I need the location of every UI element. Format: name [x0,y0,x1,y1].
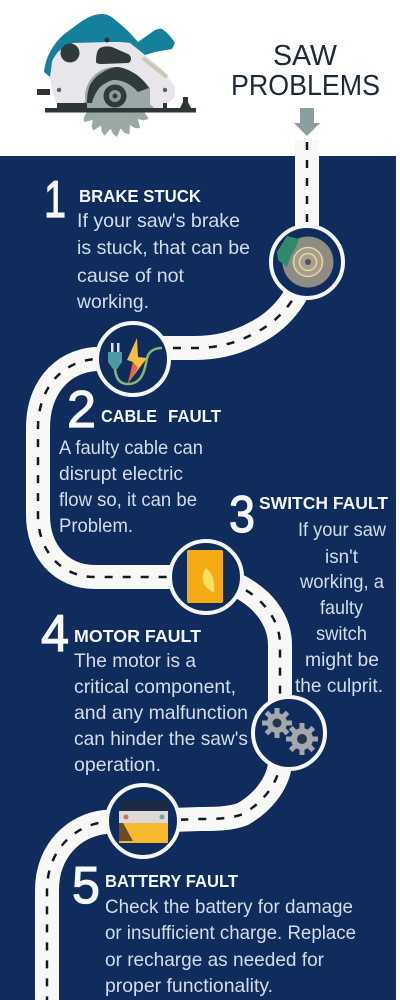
icon: battery [107,785,179,857]
step 5: battery fault: or recharge as needed for [105,949,324,971]
step 4: motor fault: operation. [74,754,161,776]
step 5: battery fault: Check the battery for damage [105,896,353,918]
step 2: cable fault: flow so, it can be [59,489,197,511]
step 3: switch fault: faulty [320,597,363,619]
step 4: motor fault: 4 [41,605,69,663]
icon: circular saw [37,14,196,137]
step 5: battery fault: BATTERY FAULT [105,871,238,891]
step 2: cable fault: A faulty cable can [59,437,203,459]
step 4: motor fault [41,605,248,776]
icon: brake disc [271,226,343,298]
step 2: cable fault [59,381,221,537]
step 5: battery fault [72,857,356,997]
step 3: switch fault: isn't [325,546,359,568]
winding road [38,140,307,1000]
step 3: switch fault: might be [305,649,379,671]
step 4: motor fault: critical component, [74,676,236,698]
step 3: switch fault: If your saw [298,519,387,541]
step 5: battery fault: 5 [72,857,100,915]
icon: cable and lightning [97,323,169,395]
step 5: battery fault: or insufficient charge. Replace [105,922,356,944]
step 3: switch fault: working, a [299,571,384,593]
title: PROBLEMS [231,70,380,102]
title: SAW [273,40,338,72]
title [231,40,380,102]
step 2: cable fault: CABLE [101,406,157,426]
arrow [294,108,320,136]
step 2: cable fault: Problem. [59,515,133,537]
icon: gears [253,697,325,769]
step 1: brake stuck: working. [76,291,149,313]
step 1: brake stuck: cause of not [77,265,185,287]
step 4: motor fault: can hinder the saw's [74,728,248,750]
icon: switch [170,541,242,613]
step 2: cable fault: FAULT [168,406,221,426]
step 3: switch fault: the culprit. [295,675,383,697]
step 4: motor fault: MOTOR FAULT [74,626,201,646]
step 2: cable fault: 2 [67,381,96,439]
step 2: cable fault: disrupt electric [59,463,183,485]
step 4: motor fault: The motor is a [74,650,196,672]
step 1: brake stuck: is stuck, that can be [77,237,250,259]
step 3: switch fault [229,486,388,697]
step 3: switch fault: SWITCH FAULT [259,493,388,513]
step 3: switch fault: switch [316,623,367,645]
step 1: brake stuck: If your saw's brake [77,210,240,232]
step 1: brake stuck [44,171,250,313]
step 1: brake stuck: 1 [44,171,66,229]
step 5: battery fault: proper functionality. [105,975,273,997]
step 3: switch fault: 3 [229,486,255,544]
step 1: brake stuck: BRAKE STUCK [79,186,201,206]
step 4: motor fault: and any malfunction [74,702,248,724]
